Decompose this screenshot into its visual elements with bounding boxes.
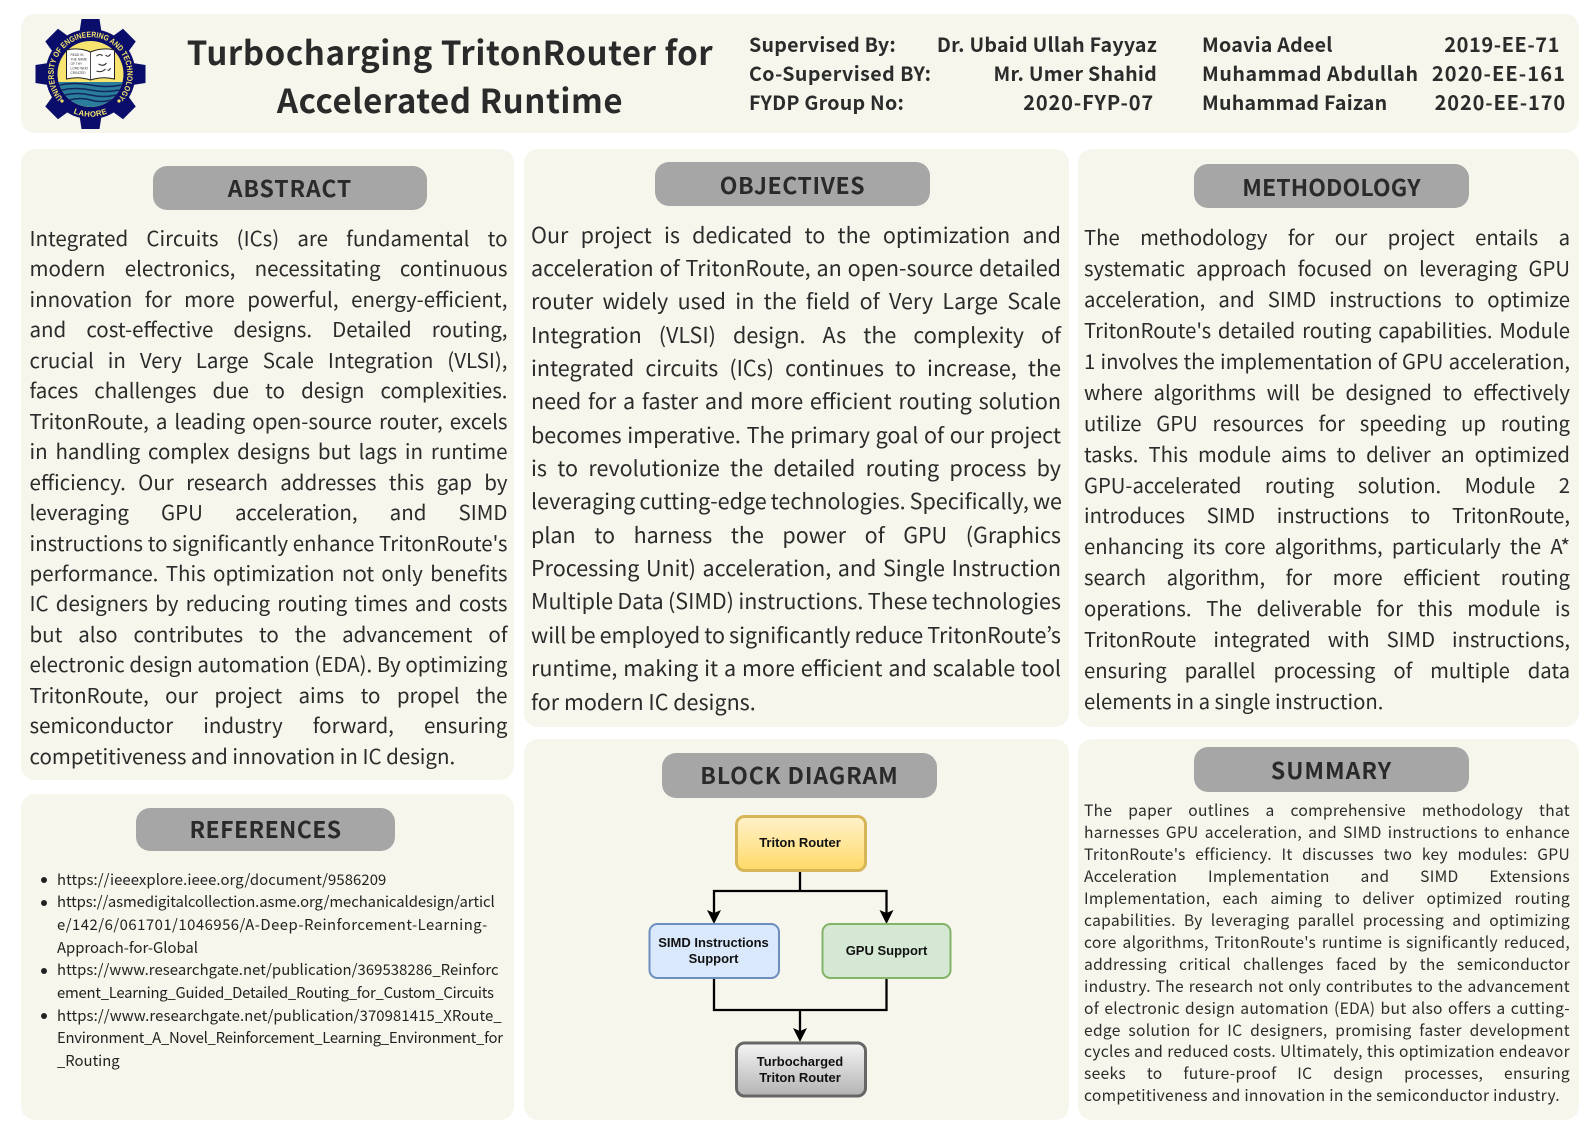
text block: methodology body: 1 involves the implementation of GPU acceleration, [1084,345,1570,375]
text block: students: Muhammad Abdullah [1202,58,1419,87]
node: GPU Support: GPU Support [846,943,928,958]
text block: methodology body: enhancing its core algorithms, particularly the A* [1084,530,1570,560]
text block: abstract body: competitiveness and innovation in IC design. [30,740,455,770]
text block: methodology body: TritonRoute integrated with SIMD instructions, [1084,623,1570,653]
text block: summary body: of electronic design automation (EDA) but also offers a cutting- [1084,997,1570,1019]
text block: reference links: Approach-for-Global [57,937,198,958]
icon: university logo: LORD WHO [70,66,89,70]
text block: reference links [57,868,503,1071]
node: Triton Router: Triton Router [759,835,841,850]
node: SIMD Instructions Support: SIMD Instructions [658,935,769,950]
panel: methodology [1078,149,1579,727]
text block: students: Muhammad Faizan [1202,87,1387,116]
text block: objectives body: Our project is dedicated to the optimization and [531,218,1061,250]
node: Turbocharged Triton Router: Turbocharged [757,1054,843,1069]
text block: methodology body: The methodology for our project entails a [1084,221,1570,251]
text block: reference links: https://asmedigitalcollection.asme.org/mechanicaldesign/articl [57,891,495,912]
text block: abstract body: innovation for more powerful, energy-efficient, [30,283,508,313]
text block: summary body: competitiveness and innovation in the semiconductor industry. [1084,1084,1560,1106]
text block: objectives body: Processing Unit) acceleration, and Single Instruction [531,552,1061,583]
heading: summary [1194,747,1469,792]
text block: abstract body: efficiency. Our research addresses this gap by [30,466,508,496]
text block: objectives body: is to revolutionize the detailed routing process by [531,452,1061,483]
heading: references [136,808,395,851]
heading: abstract: ABSTRACT [228,170,352,204]
text block: students [1202,29,1566,116]
text block: abstract body [30,222,508,770]
icon: university logo: UNIVERSITY OF ENGINEERING AND TECHNOLOGY [48,32,133,102]
text block: supervisors [749,29,1157,116]
text block: objectives body: acceleration of TritonRoute, an open-source detailed [531,252,1061,283]
text block: abstract body: and cost-effective designs. Detailed routing, [30,313,508,343]
text block: methodology body: acceleration, and SIMD instructions to optimize [1084,283,1570,313]
text block: abstract body: semiconductor industry forward, ensuring [30,709,508,739]
heading: objectives [655,162,930,206]
text block: methodology body [1084,221,1570,715]
text block: students: Moavia Adeel [1202,29,1333,58]
text block: reference links: https://ieeexplore.ieee.org/document/9586209 [57,868,386,890]
text block: objectives body: will be employed to significantly reduce TritonRoute’s [531,619,1061,650]
text block: supervisors: Co-Supervised BY: [749,58,931,87]
text block: objectives body: becomes imperative. The primary goal of our project [531,419,1061,450]
chart: flow diagram [648,815,952,1098]
text block: supervisors: Supervised By: [749,29,896,58]
node: Turbocharged Triton Router [736,1043,866,1096]
text block: objectives body: for modern IC designs. [531,686,756,717]
text block: summary body: The paper outlines a comprehensive methodology that [1084,799,1570,821]
text block: methodology body: introduces SIMD instructions to TritonRoute, [1084,499,1570,529]
text block: summary body: cycles and reduced costs. Ultimately, this optimization endeavor [1084,1040,1570,1062]
text block: reference links: _Routing [57,1050,120,1071]
text block: methodology body: GPU-accelerated routing solution. Module 2 [1084,468,1570,498]
icon: university logo: CREATED [70,71,86,75]
text block: students: 2020-EE-161 [1432,58,1566,87]
text block: students: 2019-EE-71 [1444,29,1560,58]
heading: references: REFERENCES [189,811,342,845]
text block: abstract body: faces challenges due to design complexities. [30,374,508,404]
text block: objectives body: runtime, making it a more efficient and scalable tool [531,652,1061,683]
text block: objectives body [531,218,1062,717]
text block: abstract body: Integrated Circuits (ICs) are fundamental to [30,222,508,252]
text block: methodology body: ensuring parallel processing of multiple data [1084,654,1570,684]
text block: reference links: e/142/6/061701/1046956/A-Deep-Reinforcement-Learning- [57,914,488,935]
panel: header [21,14,1579,133]
text block: summary body: harnesses GPU acceleration, and SIMD instructions to enhance [1084,821,1570,843]
node: SIMD Instructions Support: Support [689,951,739,966]
text block: objectives body: plan to harness the power of GPU (Graphics [531,519,1061,550]
text block: objectives body: Integration (VLSI) design. As the complexity of [531,319,1061,350]
panel: summary [1078,739,1579,1120]
panel: block diagram [524,739,1069,1120]
text block: summary body: Acceleration Implementation and SIMD Extensions [1084,865,1570,887]
panel: references [21,794,514,1120]
panel: objectives [524,149,1069,727]
icon: university logo: LAHORE [74,108,108,117]
text block: summary body [1084,799,1570,1106]
text block: methodology body: elements in a single instruction. [1084,685,1383,715]
text block: summary body: industry. The research not only contributes to the advancement [1084,975,1570,997]
heading: methodology: METHODOLOGY [1242,168,1421,202]
title: Accelerated Runtime [277,75,623,123]
text block: methodology body: TritonRoute's detailed routing capabilities. Module [1084,314,1570,344]
text block: students: 2020-EE-170 [1435,87,1566,116]
node: Turbocharged Triton Router: Triton Router [759,1070,841,1085]
text block: summary body: addressing critical challenges faced by the semiconductor [1084,953,1570,975]
heading: methodology [1194,164,1469,208]
text block: objectives body: leveraging cutting-edge technologies. Specifically, we [531,485,1062,516]
title [187,27,713,123]
heading: block diagram: BLOCK DIAGRAM [700,757,899,791]
text block: summary body: seeks to future-proof IC design processes, ensuring [1084,1062,1570,1084]
text block: supervisors: 2020-FYP-07 [1023,87,1154,116]
heading: abstract [153,166,427,210]
text block: abstract body: performance. This optimization not only benefits [30,557,508,587]
list: reference bullets [41,877,47,1019]
text block: abstract body: in handling complex designs but lags in runtime [30,435,508,465]
text block: methodology body: where algorithms will be designed to effectively [1084,376,1570,406]
text block: summary body: core algorithms, TritonRoute's runtime is significantly reduced, [1084,931,1570,953]
text block: reference links: https://www.researchgate.net/publication/370981415_XRoute_ [57,1005,502,1026]
node: Triton Router [736,816,866,870]
heading: objectives: OBJECTIVES [720,166,865,200]
text block: reference links: Environment_A_Novel_Reinforcement_Learning_Environment_for [57,1027,503,1048]
text block: supervisors: Dr. Ubaid Ullah Fayyaz [937,29,1157,58]
text block: objectives body: need for a faster and more efficient routing solution [531,385,1061,416]
text block: objectives body: Multiple Data (SIMD) instructions. These technologies [531,585,1061,616]
node: SIMD Instructions Support [650,924,779,978]
text block: supervisors: FYDP Group No: [749,87,904,116]
icon: university logo: OF THY [70,62,83,66]
heading: block diagram [662,753,937,798]
text block: abstract body: modern electronics, necessitating continuous [30,252,508,282]
node: GPU Support [822,924,950,978]
text block: methodology body: search algorithm, for more efficient routing [1084,561,1570,591]
text block: supervisors: Mr. Umer Shahid [994,58,1157,87]
text block: abstract body: leveraging GPU acceleration, and SIMD [30,496,508,526]
text block: methodology body: tasks. This module aims to deliver an optimized [1084,438,1570,468]
text block: reference links: https://www.researchgate.net/publication/369538286_Reinforc [57,959,499,980]
text block: methodology body: utilize GPU resources for speeding up routing [1084,407,1570,437]
text block: objectives body: integrated circuits (ICs) continues to increase, the [531,352,1061,383]
icon: university logo: READ IN [70,53,84,57]
icon: university logo [36,19,146,129]
text block: methodology body: operations. The deliverable for this module is [1084,592,1570,622]
text block: summary body: TritonRoute's efficiency. It discusses two key modules: GPU [1084,843,1570,865]
text block: abstract body: IC designers by reducing routing times and costs [30,587,508,617]
text block: abstract body: instructions to significantly enhance TritonRoute's [30,527,508,557]
heading: summary: SUMMARY [1271,752,1392,786]
text block: abstract body: crucial in Very Large Scale Integration (VLSI), [30,344,508,374]
text block: abstract body: but also contributes to the advancement of [30,618,508,648]
text block: summary body: Implementation, each aiming to deliver optimized routing [1084,887,1570,909]
panel: abstract [21,149,514,780]
title: Turbocharging TritonRouter for [187,27,713,75]
text block: summary body: capabilities. By leveraging parallel processing and optimizing [1084,909,1570,931]
text block: abstract body: TritonRoute, our project aims to propel the [30,679,508,709]
text block: objectives body: router widely used in the field of Very Large Scale [531,285,1061,316]
text block: reference links: ement_Learning_Guided_Detailed_Routing_for_Custom_Circuits [57,982,494,1003]
text block: abstract body: TritonRoute, a leading open-source router, excels [30,405,508,435]
text block: methodology body: systematic approach focused on leveraging GPU [1084,252,1570,282]
icon: university logo: THE NAME [70,58,87,62]
text block: abstract body: electronic design automation (EDA). By optimizing [30,648,508,678]
text block: summary body: edge solution for IC designers, promising faster development [1084,1019,1570,1041]
